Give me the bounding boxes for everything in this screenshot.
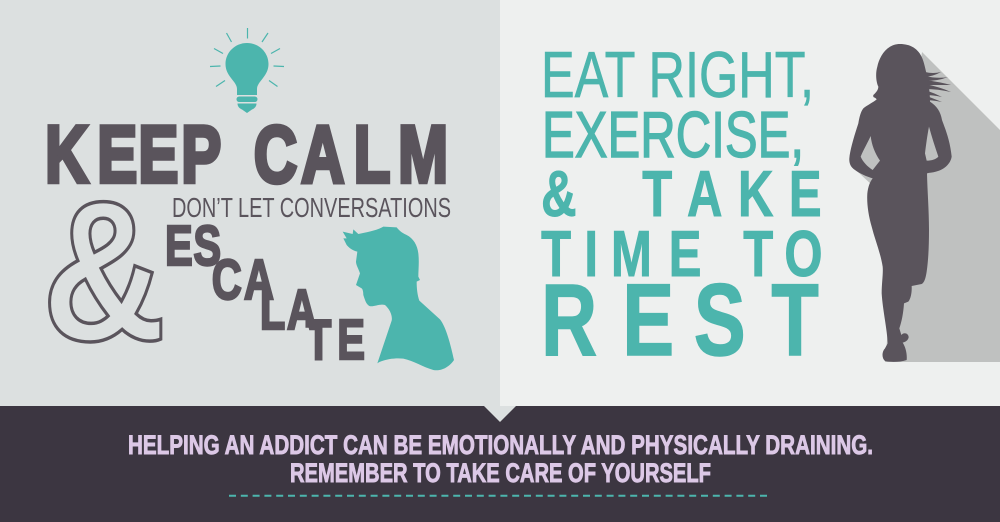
heading: and take: & TAKE <box>541 159 822 231</box>
panel: right background <box>500 0 1000 406</box>
heading: eat right: EAT RIGHT, <box>541 38 814 111</box>
heading: rest: REST <box>541 264 819 378</box>
panel: left background <box>0 0 500 406</box>
text: escalate staircase: ES <box>165 214 221 278</box>
shadow: runner long shadow <box>858 52 1000 362</box>
text: banner line two: REMEMBER TO TAKE CARE OF YOURSELF <box>290 458 711 488</box>
heading: time to: TIME TO <box>541 219 822 291</box>
panel: bottom banner <box>0 406 1000 522</box>
text: escalate staircase <box>165 214 365 372</box>
text: escalate staircase: LA <box>260 278 317 342</box>
heading: keep calm: KEEP CALM <box>45 109 448 200</box>
text: don't let conversations: DON’T LET CONVERSATIONS <box>172 192 451 223</box>
text: escalate staircase: TE <box>306 308 365 372</box>
text: escalate staircase: CA <box>212 248 274 312</box>
icon: light bulb <box>210 28 284 113</box>
icon: outlined ampersand: & <box>42 159 166 383</box>
icon: runner silhouette <box>849 44 952 362</box>
heading: exercise: EXERCISE, <box>542 98 804 171</box>
icon: man silhouette <box>343 227 454 370</box>
